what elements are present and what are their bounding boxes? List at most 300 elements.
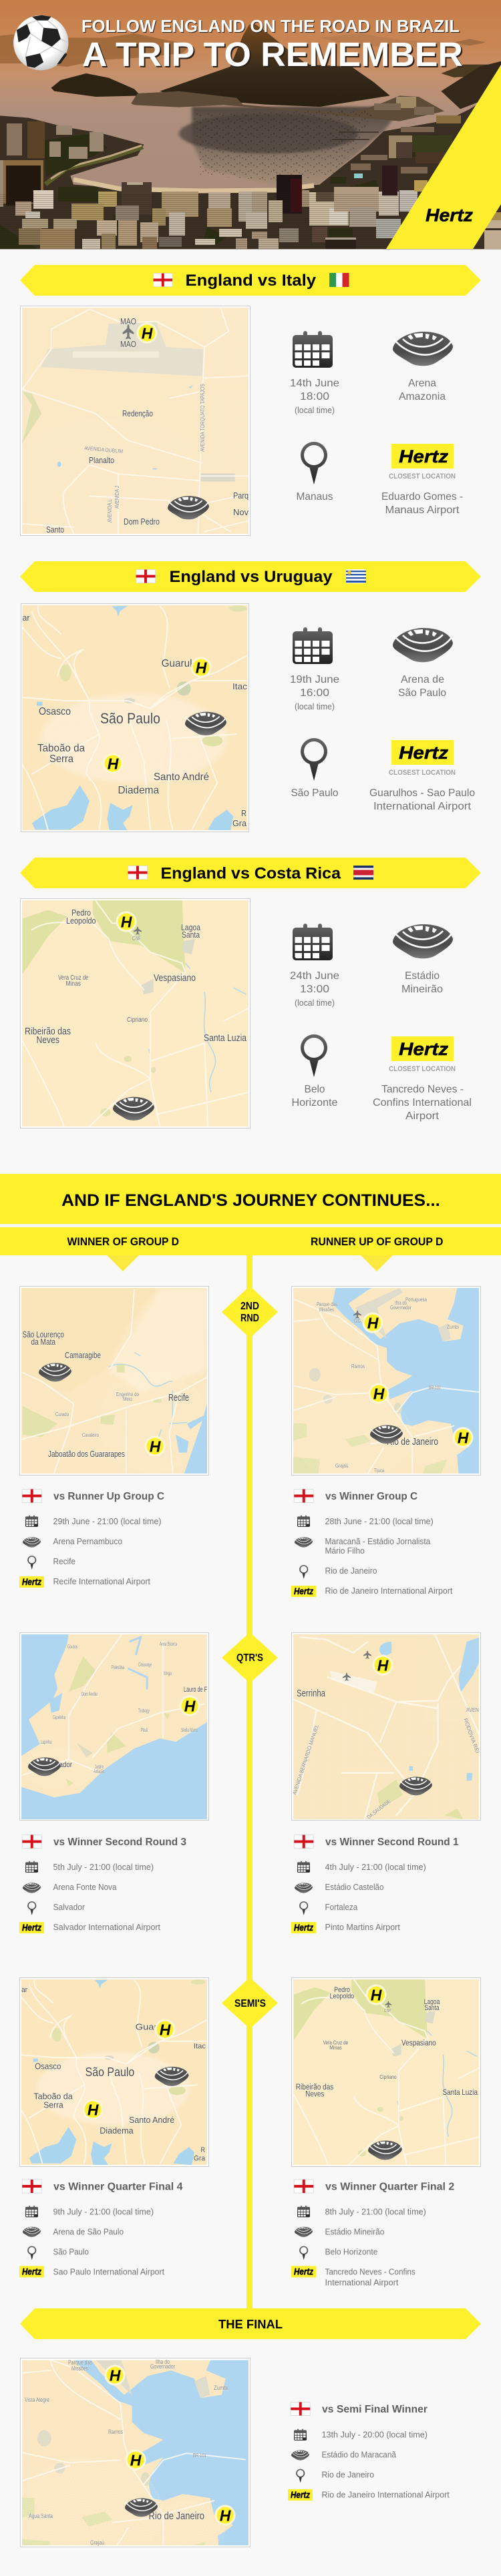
marker: stadium: [168, 496, 209, 519]
details: vs Winner Second Round 1: Hertz: [294, 1922, 313, 1933]
Hertz closest location: CLOSEST LOCATION: [389, 472, 456, 480]
details: vs Winner Group C: vs Winner Group C: [325, 1491, 418, 1502]
map labels: Itac: [194, 2042, 206, 2050]
map labels: Redenção: [122, 408, 153, 418]
details: vs Winner Quarter Final 4: 9th July - 21:00 (local time): [53, 2208, 154, 2217]
map labels: Taboão da: [33, 2091, 73, 2102]
marker: Hertz: H: [108, 755, 119, 773]
marker: second round: 2ND: [240, 1301, 259, 1312]
marker: Hertz: H: [367, 1315, 379, 1332]
match date: [290, 378, 339, 415]
banner: England vs Costa Rica: [20, 858, 481, 888]
marker: second round: RND: [240, 1313, 259, 1324]
details: vs Winner Second Round 3: Salvador International Airport: [53, 1923, 161, 1932]
map labels: Pituã: [141, 1727, 148, 1733]
map labels: [46, 316, 248, 535]
map labels: Palestina: [112, 1664, 124, 1670]
map labels: Grajaú: [335, 1463, 349, 1469]
match date: (local time): [295, 702, 335, 711]
marker: Hertz: [191, 657, 211, 678]
Hertz closest location: CLOSEST LOCATION: [389, 769, 456, 777]
match date: 14th June: [290, 378, 339, 389]
icon: stadium: [393, 332, 453, 366]
marker: Hertz: H: [121, 913, 132, 930]
map labels: ador: [59, 1760, 72, 1769]
map labels: [317, 1297, 459, 1474]
Hertz yellow stripe: [386, 65, 501, 249]
city: Horizonte: [291, 1097, 338, 1108]
marker: stadium: [185, 712, 226, 735]
map labels: AVENIDA BERNARDO MANUEL: [291, 1724, 320, 1796]
marker: Hertz: [362, 1312, 383, 1333]
details: vs Semi Final Winner: vs Semi Final Winner: [322, 2404, 428, 2415]
map labels: Ramos: [108, 2429, 123, 2435]
details: vs Winner Quarter Final 2: 8th July - 21:00 (local time): [325, 2208, 426, 2217]
marker: stadium: [39, 1363, 71, 1381]
map labels: Vespasiano: [154, 972, 196, 984]
map labels: Guar: [136, 2021, 158, 2031]
map: Sao Paulo: [19, 603, 253, 834]
map labels: Rio de Janeiro: [148, 2511, 204, 2522]
map labels: Lauro de F: [184, 1686, 207, 1694]
map labels: Missões: [71, 2365, 88, 2372]
map labels: Vera Cruz de: [323, 2040, 348, 2046]
marker: Hertz: H: [458, 1429, 469, 1447]
marker: Hertz: H: [373, 1385, 385, 1403]
match date: 16:00: [300, 687, 329, 699]
details: vs Winner Quarter Final 2: Hertz: [294, 2266, 313, 2277]
map labels: [25, 2358, 228, 2546]
map labels: Cavaleiro: [82, 1432, 99, 1438]
marker: quarter finals: [222, 1632, 278, 1683]
map labels: Ilha do: [395, 1300, 407, 1306]
map labels: Portuguesa: [405, 1297, 427, 1303]
details: vs Winner Second Round 1: Estádio Castelão: [325, 1883, 384, 1892]
map labels: AVENIDA J: [114, 486, 120, 509]
map labels: Água Santa: [29, 2513, 53, 2519]
details: vs Winner Quarter Final 2: Estádio Mineirão: [325, 2228, 384, 2237]
details: vs Runner Up Group C: Recife: [53, 1557, 75, 1566]
marker: Hertz: [83, 2100, 103, 2120]
map labels: Parque das: [317, 1301, 337, 1307]
map labels: Stella Maris: [181, 1727, 198, 1733]
map labels: Santo André: [129, 2115, 174, 2125]
map labels: Santo: [46, 525, 64, 535]
marker: Hertz: [116, 912, 136, 932]
city: Manaus: [297, 491, 333, 503]
map labels: Serra: [43, 2100, 63, 2110]
map labels: Trobogy: [138, 1708, 150, 1714]
map labels: Parque das: [68, 2359, 92, 2366]
details: vs Winner Second Round 3: 5th July - 21:00 (local time): [53, 1863, 154, 1872]
group match 1: England vs Italy: [13, 265, 481, 539]
banner: England vs Italy: England vs Italy: [186, 272, 317, 290]
map labels: Nov: [233, 507, 248, 517]
marker: Hertz: H: [150, 1437, 161, 1455]
banner: England vs Italy: [20, 265, 481, 296]
map labels: Dom Pedro: [124, 517, 160, 527]
map labels: CNF: [384, 2007, 391, 2013]
hero subtitle: FOLLOW ENGLAND ON THE ROAD IN BRAZIL: [81, 16, 460, 36]
details: vs Winner Quarter Final 2: [291, 2180, 454, 2288]
marker: Hertz: [144, 1436, 166, 1456]
map labels: [21, 1986, 206, 2162]
marker: Hertz: [369, 1383, 389, 1404]
stadium name: Arena: [408, 378, 436, 389]
map labels: Osasco: [35, 2061, 61, 2071]
group match 2: England vs Uruguay: [19, 561, 481, 834]
map labels: Meio: [123, 1396, 132, 1402]
hero photo: Rio de Janeiro bay at sunset: [0, 0, 501, 249]
map labels: Santa: [182, 930, 200, 940]
details: vs Winner Second Round 3: Arena Fonte Nova: [53, 1883, 117, 1892]
map labels: Leopoldo: [330, 1993, 354, 2001]
marker: stadium: [370, 1425, 403, 1443]
marker: Hertz: H: [110, 2366, 121, 2384]
details: vs Winner Quarter Final 4: vs Winner Quarter Final 4: [53, 2181, 183, 2193]
details: vs Semi Final Winner: 13th July - 20:00 (local time): [322, 2431, 428, 2440]
map: Sao Paulo, semi final: [19, 1977, 210, 2167]
map labels: Grajaú: [90, 2539, 104, 2546]
group outcome band: [0, 1227, 501, 1271]
stadium name: Estádio: [405, 970, 440, 982]
details: vs Winner Quarter Final 4: São Paulo: [53, 2248, 89, 2257]
stadium name: [398, 674, 446, 699]
icon: pin: [301, 738, 327, 781]
details: vs Winner Second Round 3: [19, 1835, 186, 1933]
map labels: AVEN: [466, 1707, 479, 1713]
boats on the bay: [194, 110, 374, 182]
map labels: DA SAUDADE: [366, 1799, 391, 1821]
knockout heading band: AND IF ENGLAND'S JOURNEY CONTINUES...: [61, 1191, 440, 1210]
map labels: Pedro: [71, 908, 91, 918]
map: Belo Horizonte: [19, 898, 253, 1130]
details: vs Winner Second Round 3: Hertz: [22, 1922, 41, 1933]
stadium name: Amazonia: [399, 391, 446, 402]
group match 3: England vs Costa Rica: [19, 858, 481, 1130]
icon: stadium: [393, 628, 453, 662]
details: vs Winner Second Round 1: Fortaleza: [325, 1903, 357, 1912]
map labels: [41, 1641, 207, 1775]
map labels: ar: [23, 613, 30, 623]
marker: Hertz: [215, 2505, 235, 2525]
map labels: BR-101: [193, 2453, 206, 2459]
airport name: International Airport: [373, 801, 472, 812]
marker: stadium: [399, 1777, 432, 1795]
map labels: Gra: [232, 818, 247, 828]
map labels: Planalto: [89, 455, 114, 465]
group outcome band: WINNER OF GROUP D: [67, 1235, 179, 1248]
marker: Hertz: [373, 1655, 393, 1675]
details: vs Winner Group C: 28th June - 21:00 (local time): [325, 1517, 434, 1526]
details: vs Winner Group C: Maracanã - Estádio Jornalista: [325, 1537, 430, 1546]
map labels: MAO: [120, 339, 136, 349]
map labels: Guarul: [162, 658, 192, 669]
map labels: Lagoa: [424, 1998, 440, 2006]
details: vs Winner Group C: Hertz: [294, 1586, 313, 1596]
map: Rio de Janeiro, final: [0, 2314, 284, 2576]
marker: stadium: [155, 2067, 189, 2086]
banner: The Final: [20, 2308, 481, 2339]
marker: second round: [222, 1286, 278, 1338]
icon: pin: [301, 442, 327, 485]
map labels: Cipriano: [379, 2074, 397, 2080]
airport name: [381, 491, 463, 516]
marker: Hertz: H: [160, 2021, 171, 2038]
map labels: Diadema: [118, 785, 159, 796]
banner: England vs Costa Rica: England vs Costa Rica: [160, 865, 341, 882]
details: vs Semi Final Winner: Hertz: [291, 2489, 310, 2500]
map: Belo Horizonte, semi final: [291, 1978, 482, 2168]
map labels: Governador: [150, 2363, 175, 2370]
marker: Hertz: H: [220, 2507, 231, 2524]
map labels: [296, 1986, 478, 2098]
map: Manaus: [13, 305, 253, 539]
match date: [290, 674, 339, 711]
map labels: Armação: [94, 1768, 104, 1775]
city: [291, 1084, 338, 1108]
map labels: Minas: [65, 980, 81, 988]
details: vs Runner Up Group C: vs Runner Up Group C: [53, 1491, 164, 1502]
marker: Hertz: [155, 2019, 175, 2039]
details: vs Semi Final Winner: Estádio do Maracanã: [322, 2451, 396, 2460]
marker: stadium: [125, 2498, 158, 2517]
details: vs Winner Group C: [291, 1490, 453, 1597]
banner: The Final: THE FINAL: [218, 2318, 283, 2331]
airport name: Confins International: [373, 1097, 472, 1108]
map labels: R: [241, 808, 246, 818]
details: vs Winner Quarter Final 4: Sao Paulo International Airport: [53, 2268, 165, 2277]
map labels: Jardim: [95, 1764, 104, 1770]
map: Fortaleza: [288, 1632, 486, 1822]
details: vs Runner Up Group C: [19, 1490, 164, 1588]
marker: Hertz: [136, 323, 158, 343]
marker: Hertz: [104, 2365, 126, 2385]
marker: Hertz: [366, 1985, 386, 2005]
match date: 19th June: [290, 674, 339, 685]
map labels: Ilha do: [156, 2358, 170, 2365]
map labels: Camaragibe: [65, 1350, 101, 1360]
map labels: [291, 1651, 480, 1821]
icon: calendar: [293, 627, 333, 664]
map labels: Capelinha: [53, 1714, 65, 1720]
map labels: Parq: [233, 491, 248, 501]
details: vs Winner Group C: Rio de Janeiro: [325, 1566, 377, 1576]
details: vs Winner Second Round 1: vs Winner Second Round 1: [325, 1837, 459, 1848]
marker: Hertz: H: [142, 324, 153, 342]
icon: calendar: [293, 331, 333, 368]
details: vs Winner Group C: Rio de Janeiro International Airport: [325, 1586, 453, 1596]
match date: [290, 970, 339, 1008]
map labels: Lapinha: [41, 1739, 51, 1745]
marker: Hertz: H: [371, 1986, 382, 2003]
map: Salvador: [19, 1632, 211, 1822]
marker: stadium: [28, 1757, 61, 1776]
marker: semi finals: [222, 1977, 278, 2029]
map labels: da Mata: [31, 1337, 56, 1347]
map labels: [25, 908, 247, 1046]
Hertz closest location: CLOSEST LOCATION: [389, 1065, 456, 1073]
banner: England vs Uruguay: England vs Uruguay: [170, 568, 333, 586]
map labels: Diadema: [100, 2126, 134, 2136]
marker: quarter finals: QTR'S: [236, 1652, 263, 1664]
map labels: ar: [21, 1986, 27, 1994]
match date: (local time): [295, 998, 335, 1008]
map labels: Vista Alegre: [25, 2396, 49, 2403]
match date: 24th June: [290, 970, 339, 982]
details: vs Winner Second Round 1: Pinto Martins Airport: [325, 1923, 400, 1932]
map labels: Curado: [55, 1411, 69, 1417]
details: vs Winner Quarter Final 2: Belo Horizonte: [325, 2248, 377, 2257]
map labels: Missões: [319, 1307, 334, 1313]
hero title: A TRIP TO REMEMBER: [82, 35, 463, 73]
marker: Hertz: H: [130, 2452, 142, 2469]
airport name: [373, 1084, 472, 1122]
details: vs Semi Final Winner: Rio de Janeiro International Airport: [322, 2490, 450, 2499]
icon: pin: [301, 1034, 327, 1077]
marker: Hertz: H: [377, 1656, 389, 1674]
stadium name: [401, 970, 443, 995]
map labels: Cipriano: [127, 1016, 148, 1024]
map labels: Santa: [424, 2004, 440, 2012]
icon: stadium: [393, 924, 453, 958]
city: São Paulo: [291, 787, 339, 799]
map labels: São Paulo: [100, 710, 160, 727]
details: vs Runner Up Group C: 29th June - 21:00 (local time): [53, 1517, 161, 1526]
details: vs Winner Second Round 1: [291, 1835, 459, 1933]
match date: (local time): [295, 406, 335, 415]
Hertz logo on hero: Hertz: [426, 206, 474, 226]
marker: Hertz: H: [196, 659, 207, 677]
map labels: São Lourenço: [23, 1329, 64, 1339]
match date: 13:00: [300, 984, 329, 995]
Hertz closest location: Hertz: [399, 446, 449, 466]
Hertz closest location: Hertz: [399, 743, 449, 763]
city: Belo: [305, 1084, 325, 1095]
marker: Hertz: [453, 1427, 473, 1448]
map labels: [23, 613, 248, 828]
map labels: BR-101: [429, 1385, 441, 1391]
banner: England vs Uruguay: [20, 561, 481, 592]
stadium name: São Paulo: [398, 687, 446, 699]
map labels: GIG: [354, 1318, 361, 1324]
map labels: Serra: [49, 753, 73, 765]
details: vs Runner Up Group C: Hertz: [22, 1576, 41, 1587]
details: vs Winner Group C: Mário Filho: [325, 1546, 365, 1556]
icon: calendar: [293, 924, 333, 960]
map labels: Leopoldo: [66, 916, 96, 926]
map labels: Zumbi: [447, 1324, 459, 1330]
map labels: Taboão da: [37, 743, 85, 754]
map labels: Areia Branca: [160, 1641, 177, 1647]
marker: Hertz: [103, 753, 123, 774]
map labels: RODOVIA REI: [462, 1718, 480, 1754]
airport name: Guarulhos - Sao Paulo: [369, 787, 475, 799]
map labels: Santa Luzia: [204, 1032, 247, 1044]
map labels: AVENIDA TORQUATO TAPAJOS: [200, 384, 206, 452]
map labels: R: [201, 2146, 205, 2154]
map labels: Itinga: [164, 1670, 172, 1676]
map labels: Lagoa: [181, 922, 201, 932]
airport name: Airport: [405, 1110, 440, 1122]
marker: semi finals: SEMI'S: [234, 1998, 266, 2009]
airport name: [369, 787, 475, 812]
centre timeline: [246, 1255, 253, 2308]
knockout heading band: [0, 1174, 501, 1224]
map labels: Cassange: [138, 1662, 152, 1668]
map labels: Rio de Janeiro: [387, 1436, 438, 1447]
map labels: Pedro: [334, 1986, 350, 1994]
map labels: Ramos: [351, 1363, 365, 1369]
map labels: Itac: [232, 681, 248, 691]
details: vs Winner Quarter Final 2: vs Winner Quarter Final 2: [325, 2181, 454, 2193]
map labels: Engenho do: [116, 1391, 139, 1397]
map labels: Osasco: [39, 706, 71, 717]
details: vs Winner Quarter Final 4: [19, 2180, 183, 2277]
Hertz closest location: Hertz: [399, 1039, 449, 1059]
match date: 18:00: [300, 391, 329, 402]
stadium name: [399, 378, 446, 402]
city: buildings: [0, 97, 501, 249]
map labels: Neves: [36, 1034, 59, 1046]
airport name: Tancredo Neves -: [381, 1084, 464, 1095]
marker: Hertz: H: [184, 1698, 196, 1715]
details: vs Semi Final Winner: [288, 2402, 450, 2501]
map labels: Gra: [194, 2154, 205, 2162]
details: vs Semi Final Winner: Rio de Janeiro: [322, 2471, 374, 2480]
map labels: Ribeirão das: [296, 2082, 333, 2091]
group outcome band: RUNNER UP OF GROUP D: [311, 1235, 444, 1248]
marker: stadium: [368, 2141, 402, 2160]
Hertz closest location: [389, 1036, 456, 1073]
details: vs Winner Second Round 3: vs Winner Second Round 3: [53, 1837, 186, 1848]
map: Rio de Janeiro, second round: [256, 1273, 501, 1495]
airport name: Eduardo Gomes -: [381, 491, 463, 503]
stadium name: Arena de: [401, 674, 444, 685]
map labels: MAO: [120, 316, 136, 326]
map labels: São Paulo: [86, 2065, 134, 2079]
Hertz closest location: [389, 740, 456, 777]
city: promenade and beach: [45, 132, 379, 191]
map labels: Ribeirão das: [25, 1026, 71, 1037]
airport name: Manaus Airport: [385, 505, 460, 516]
stadium name: Mineirão: [401, 984, 443, 995]
map labels: Vera Cruz de: [58, 974, 89, 982]
marker: stadium: [113, 1097, 154, 1120]
map labels: Coutos: [67, 1644, 77, 1650]
details: vs Winner Second Round 3: Salvador: [53, 1903, 85, 1912]
map labels: Tijuca: [374, 1468, 384, 1474]
details: vs Runner Up Group C: Arena Pernambuco: [53, 1537, 122, 1546]
details: vs Winner Quarter Final 2: International Airport: [325, 2278, 399, 2288]
map labels: Governador: [390, 1305, 411, 1311]
Hertz closest location: [389, 444, 456, 480]
map labels: Zumbi: [214, 2384, 228, 2391]
map labels: [23, 1329, 189, 1459]
map labels: AVENIDA L: [107, 499, 113, 523]
details: vs Runner Up Group C: Recife International Airport: [53, 1577, 151, 1586]
map labels: CNF: [132, 935, 141, 942]
details: vs Winner Quarter Final 4: Arena de São Paulo: [53, 2228, 124, 2237]
map: Recife: [19, 1286, 211, 1475]
marker: Hertz: [126, 2449, 146, 2471]
map labels: Serrinha: [297, 1688, 325, 1699]
details: vs Winner Quarter Final 4: Hertz: [22, 2266, 41, 2277]
marker: Hertz: [179, 1695, 200, 1716]
map labels: Jaboatão dos Guararapes: [48, 1449, 125, 1459]
details: vs Winner Second Round 1: 4th July - 21:00 (local time): [325, 1863, 426, 1872]
map labels: Santo André: [154, 771, 209, 783]
